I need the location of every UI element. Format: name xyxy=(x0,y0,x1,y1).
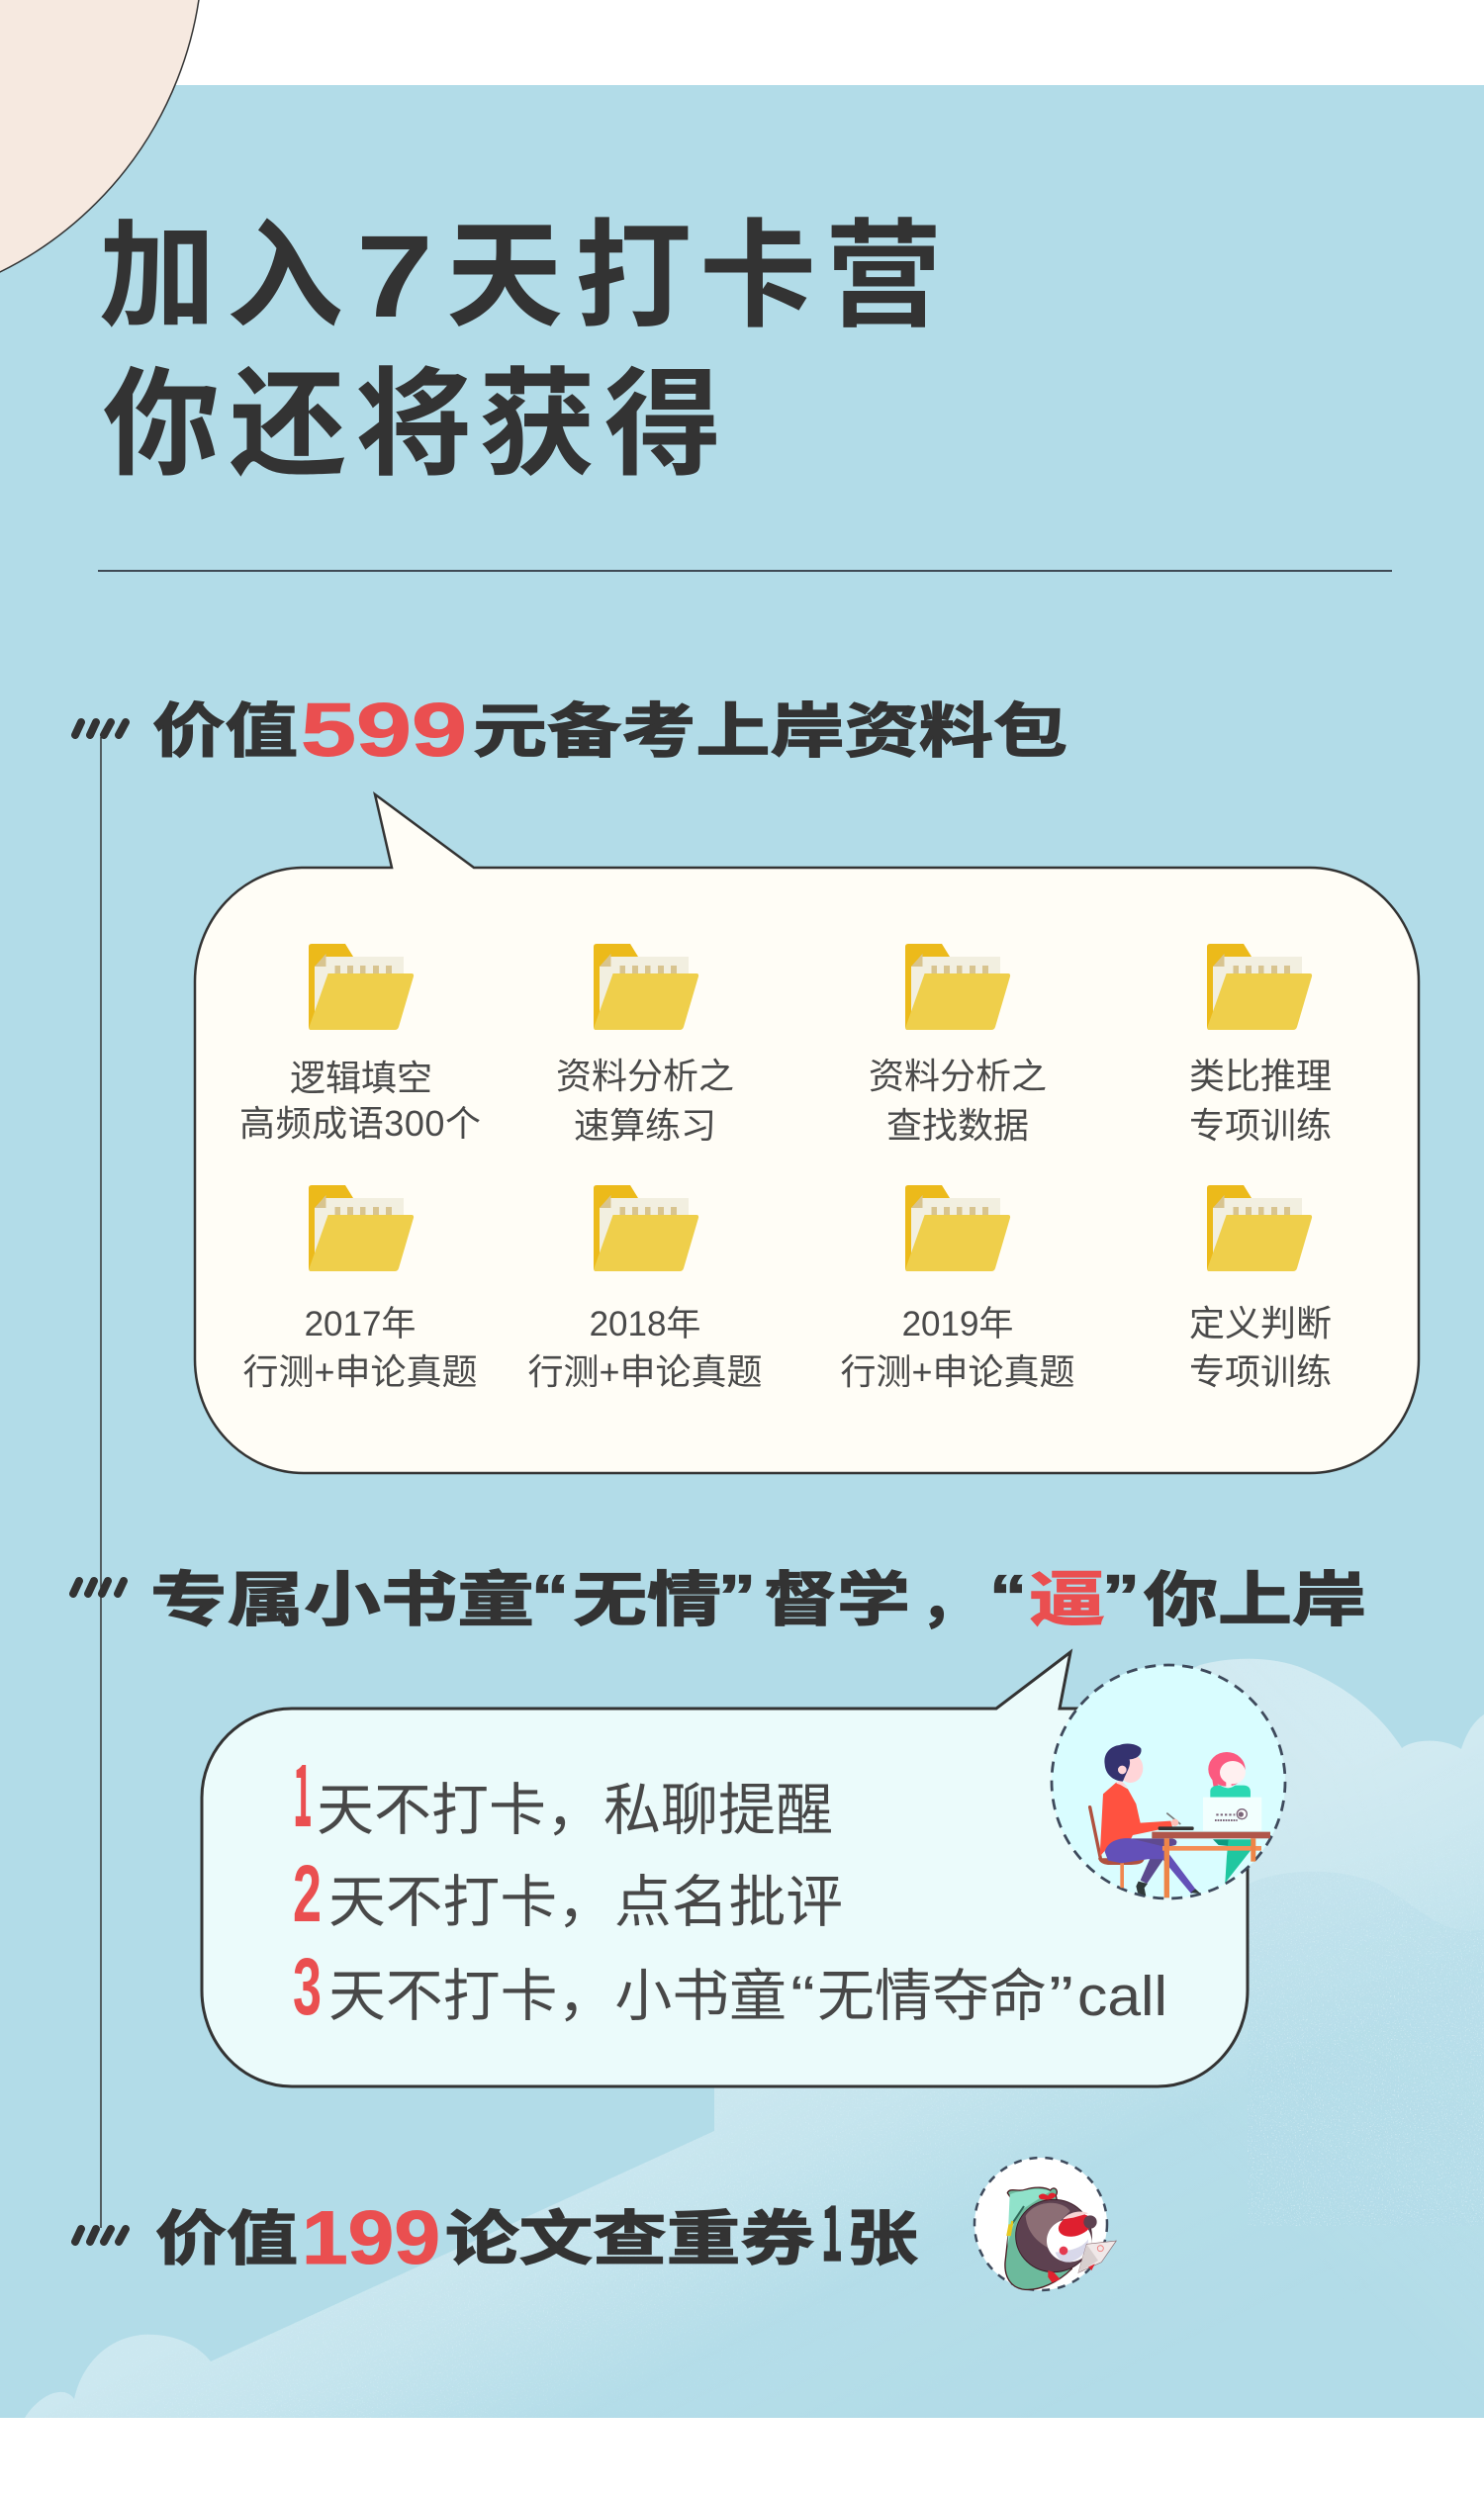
timeline marker 3 xyxy=(75,2229,126,2242)
icon: mole mascot in dashed circle xyxy=(974,2158,1116,2290)
reminder line 3: 无情夺命 xyxy=(817,1965,1047,2028)
reminder line 3: 3 xyxy=(293,1942,322,2032)
label: definition xyxy=(1189,1303,1332,1392)
heading: paper check voucher: 论文查重券 xyxy=(445,2206,814,2272)
label: data search: 查找数据 xyxy=(886,1105,1029,1146)
decorative corner circle xyxy=(0,0,203,310)
label: data search xyxy=(869,1056,1047,1146)
reminder line 3 xyxy=(293,1942,1167,2032)
label: definition: 专项训练 xyxy=(1189,1351,1332,1392)
label: calculation xyxy=(556,1056,734,1146)
folder: data search xyxy=(905,944,1010,1030)
label: 2017: 2017年 xyxy=(305,1305,416,1343)
title: 天打卡营 xyxy=(446,212,942,342)
title xyxy=(99,212,942,491)
label: analogy xyxy=(1189,1056,1332,1146)
folder: analogy xyxy=(1207,944,1312,1030)
title: 你还将获得 xyxy=(103,360,721,491)
heading: paper check voucher: 1 xyxy=(821,2176,843,2282)
label: analogy: 类比推理 xyxy=(1189,1056,1332,1096)
folder: 2017 xyxy=(309,1185,414,1271)
folder: 2018 xyxy=(594,1185,698,1271)
folder: 2019 xyxy=(905,1185,1010,1271)
heading: paper check voucher xyxy=(155,2176,918,2282)
heading: study companion: 专属小书童 xyxy=(150,1567,534,1633)
label: calculation: 资料分析之 xyxy=(556,1056,734,1096)
heading: study companion: “ xyxy=(989,1563,1027,1629)
label: vocabulary: 逻辑填空 xyxy=(290,1058,432,1098)
label: 2019: 行测+申论真题 xyxy=(840,1351,1075,1392)
reminder line 3: “ xyxy=(790,1965,815,2028)
folder: vocabulary xyxy=(309,944,414,1030)
heading: paper check voucher: 张 xyxy=(847,2206,918,2272)
reminder line 2: 天不打卡，点名批评 xyxy=(328,1871,843,1934)
heading: study companion: 无情 xyxy=(573,1567,721,1633)
heading: study companion: ” xyxy=(1102,1563,1140,1629)
label: 2018: 行测+申论真题 xyxy=(527,1351,763,1392)
label: data search: 资料分析之 xyxy=(869,1056,1047,1096)
reminder line 2: 2 xyxy=(293,1849,322,1939)
panel: resource pack speech bubble xyxy=(195,794,1419,1473)
label: calculation: 速算练习 xyxy=(574,1105,716,1146)
heading: study companion: 督学 xyxy=(764,1567,910,1633)
label: vocabulary: 高频成语300个 xyxy=(239,1103,481,1144)
heading: study companion: 逼 xyxy=(1029,1567,1105,1633)
timeline marker 1 xyxy=(75,722,126,735)
heading: study companion: 你上岸 xyxy=(1144,1567,1366,1633)
heading: study companion: “ xyxy=(531,1563,569,1629)
reminder line 1: 天不打卡，私聊提醒 xyxy=(317,1779,833,1842)
heading: resource pack xyxy=(152,689,1067,773)
label: definition: 定义判断 xyxy=(1189,1303,1332,1343)
title: 加入 xyxy=(99,212,343,342)
label: 2018 xyxy=(527,1305,763,1392)
heading: resource pack: 599 xyxy=(301,689,467,773)
heading: resource pack: 价值 xyxy=(152,698,298,765)
heading: paper check voucher: 价值 xyxy=(155,2206,298,2272)
label: 2017 xyxy=(242,1305,478,1392)
background clouds xyxy=(25,1659,1484,2418)
title: 7 xyxy=(356,212,433,342)
timeline vertical line xyxy=(100,737,102,2228)
label: 2018: 2018年 xyxy=(590,1305,700,1343)
reminder line 3: call xyxy=(1077,1965,1167,2028)
reminder line 3: 天不打卡，小书童 xyxy=(328,1965,787,2028)
heading: study companion: ， xyxy=(920,1567,979,1633)
reminder line 2 xyxy=(293,1849,843,1939)
heading: resource pack: 元备考上岸资料包 xyxy=(473,698,1067,765)
reminder line 1 xyxy=(293,1731,833,1851)
reminder line 3: ” xyxy=(1049,1965,1073,2028)
icon: tutoring illustration in dashed circle xyxy=(1052,1665,1285,1898)
folder: calculation xyxy=(594,944,698,1030)
heading: study companion: ” xyxy=(718,1563,756,1629)
heading: paper check voucher: 199 xyxy=(302,2196,440,2280)
folder: definition xyxy=(1207,1185,1312,1271)
label: 2019: 2019年 xyxy=(902,1305,1013,1343)
timeline marker 2 xyxy=(73,1581,124,1594)
label: analogy: 专项训练 xyxy=(1189,1105,1332,1146)
label: vocabulary xyxy=(239,1058,481,1144)
reminder line 1: 1 xyxy=(293,1731,313,1851)
label: 2017: 行测+申论真题 xyxy=(242,1351,478,1392)
heading: study companion xyxy=(150,1563,1366,1633)
panel: reminder speech bubble xyxy=(202,1652,1248,2086)
label: 2019 xyxy=(840,1305,1075,1392)
